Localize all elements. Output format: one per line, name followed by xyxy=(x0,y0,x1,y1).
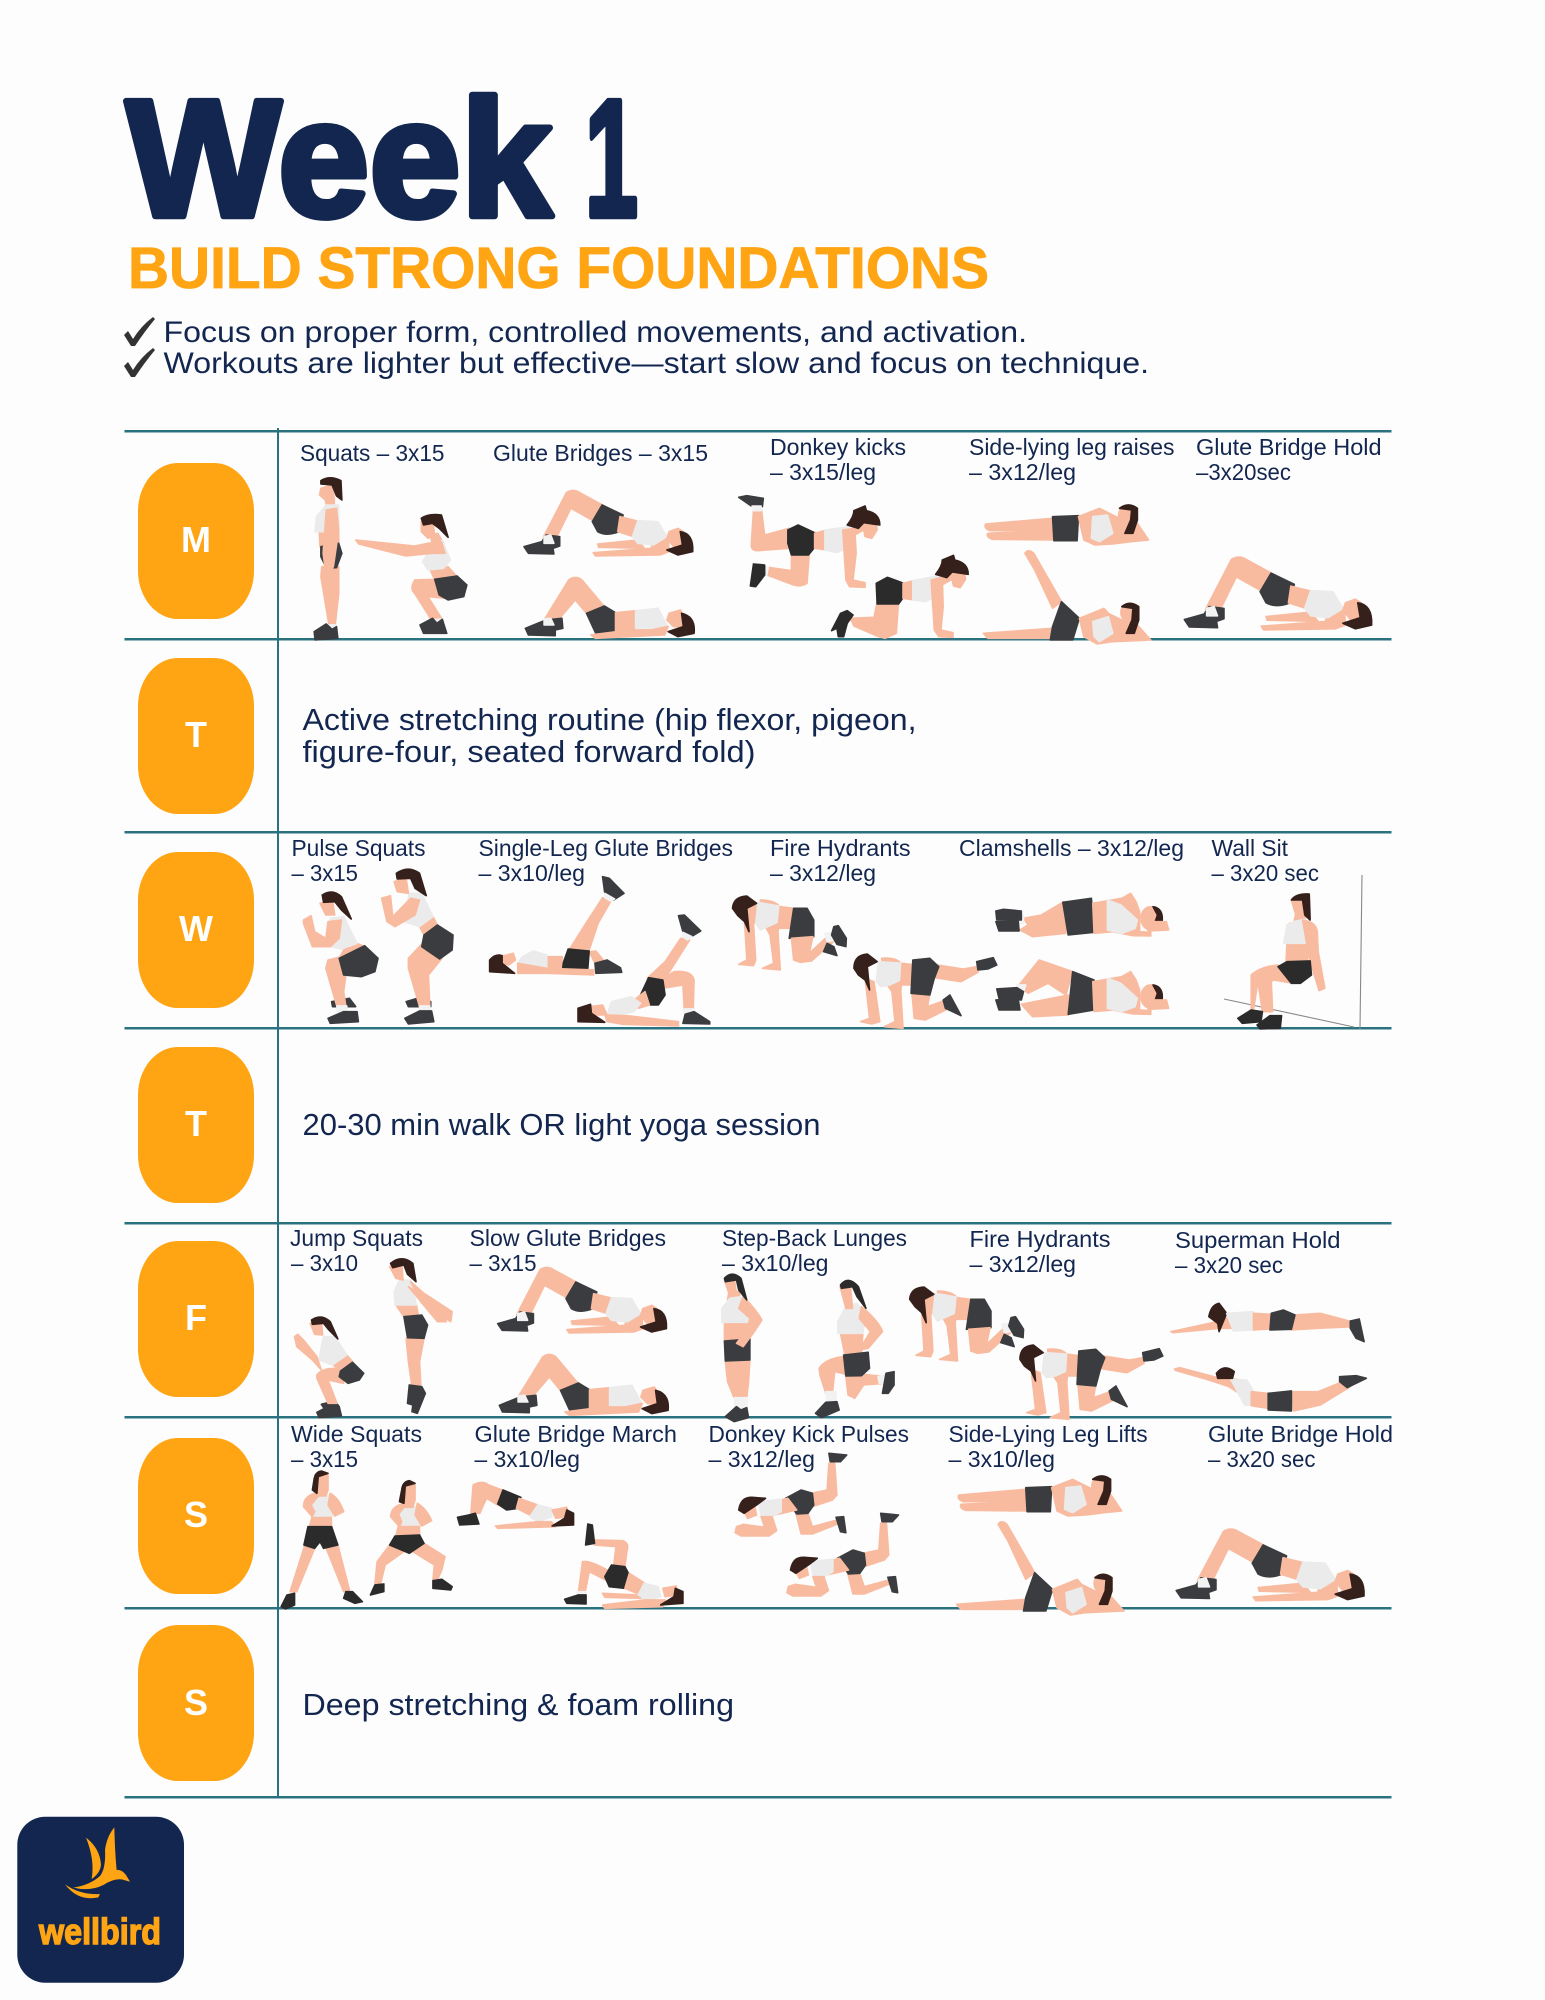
bullet list xyxy=(124,316,1149,380)
day pill: M: M xyxy=(181,519,211,560)
table grid lines xyxy=(124,428,1392,1798)
exercise: pulse squats: – 3x15 xyxy=(292,860,358,886)
exercise: glute bridge hold xyxy=(1176,1421,1393,1601)
panel: Tuesday row xyxy=(138,658,916,814)
title: 1 xyxy=(585,66,638,252)
exercise: glute bridges xyxy=(493,440,708,638)
exercise: fire hydrants: Fire Hydrants xyxy=(970,1226,1110,1252)
logo: wellbird xyxy=(17,1817,184,1983)
exercise: glute bridge hold: –3x20sec xyxy=(1196,459,1291,485)
day pill: T xyxy=(138,1047,254,1203)
exercise: donkey kicks: – 3x15/leg xyxy=(770,459,876,485)
wall and floor lines xyxy=(1224,875,1362,1029)
exercise: fire hydrants xyxy=(910,1226,1163,1419)
exercise: pulse squats xyxy=(292,835,453,1024)
exercise: squats xyxy=(300,440,467,640)
icon: check mark 1 xyxy=(124,317,155,346)
day pill: F: F xyxy=(185,1297,207,1338)
exercise: superman hold: Superman Hold xyxy=(1175,1227,1340,1253)
day pill: F xyxy=(138,1241,254,1397)
exercise: glute bridges: Glute Bridges – 3x15 xyxy=(493,440,708,466)
exercise: single-leg glute bridges: Single-Leg Glute Bridges xyxy=(478,835,733,861)
day pill: T: T xyxy=(185,714,207,755)
exercise: slow glute bridges: Slow Glute Bridges xyxy=(470,1225,666,1251)
exercise: jump squats: – 3x10 xyxy=(291,1250,358,1276)
day pill: W xyxy=(138,852,254,1008)
exercise: single-leg glute bridges xyxy=(478,835,733,1026)
rest day text: 20-30 min walk OR light yoga session xyxy=(302,1107,820,1142)
exercise: jump squats xyxy=(290,1225,452,1418)
exercise: fire hydrants: – 3x12/leg xyxy=(770,860,876,886)
exercise: step-back lunges: – 3x10/leg xyxy=(722,1250,828,1276)
day pill: M xyxy=(138,463,254,619)
panel: Wednesday row xyxy=(138,835,1362,1029)
panel: Sunday row xyxy=(138,1625,734,1781)
exercise: side-lying leg raises xyxy=(969,434,1174,644)
exercise: step-back lunges: Step-Back Lunges xyxy=(722,1225,907,1251)
exercise: donkey kick pulses: – 3x12/leg xyxy=(708,1446,815,1472)
exercise: wide squats: – 3x15 xyxy=(291,1446,358,1472)
wordmark: wellbird xyxy=(38,1911,161,1952)
bullet text 2: Workouts are lighter but effective—start slow and focus on technique. xyxy=(164,347,1149,380)
exercise: glute bridge hold: – 3x20 sec xyxy=(1208,1446,1316,1472)
exercise: step-back lunges xyxy=(722,1225,907,1422)
exercise: wall sit: Wall Sit xyxy=(1212,835,1288,861)
exercise: glute bridge march: – 3x10/leg xyxy=(474,1446,580,1472)
exercise: jump squats: Jump Squats xyxy=(290,1225,423,1251)
day pill: W: W xyxy=(179,908,213,949)
icon: check mark 2 xyxy=(124,348,155,377)
day pill: T xyxy=(138,658,254,814)
panel: Friday row xyxy=(138,1225,1366,1422)
title: Week xyxy=(126,66,553,252)
day pill: T: T xyxy=(185,1103,207,1144)
rest day text: Deep stretching & foam rolling xyxy=(302,1687,734,1722)
exercise: donkey kick pulses: Donkey Kick Pulses xyxy=(708,1421,909,1447)
exercise: clamshells: Clamshells – 3x12/leg xyxy=(959,835,1184,861)
subtitle: BUILD STRONG FOUNDATIONS xyxy=(128,236,989,301)
exercise: fire hydrants: – 3x12/leg xyxy=(970,1251,1076,1277)
rest day text: Active stretching routine (hip flexor, pigeon, xyxy=(302,702,916,737)
day pill: S xyxy=(138,1438,254,1594)
exercise: glute bridge hold: Glute Bridge Hold xyxy=(1208,1421,1393,1447)
panel: Thursday row xyxy=(138,1047,820,1203)
exercise: glute bridge march: Glute Bridge March xyxy=(474,1421,677,1447)
exercise: clamshells xyxy=(959,835,1184,1017)
exercise: glute bridge hold: Glute Bridge Hold xyxy=(1196,434,1382,460)
exercise: donkey kicks: Donkey kicks xyxy=(770,434,906,460)
exercise: wide squats: Wide Squats xyxy=(291,1421,422,1447)
exercise: side-lying leg lifts xyxy=(948,1421,1148,1615)
exercise: fire hydrants xyxy=(732,835,997,1028)
rest day text xyxy=(302,702,916,769)
exercise: side-lying leg raises: – 3x12/leg xyxy=(969,459,1076,485)
exercise: superman hold xyxy=(1171,1227,1366,1411)
exercise: slow glute bridges xyxy=(470,1225,668,1415)
exercise: squats: Squats – 3x15 xyxy=(300,440,444,466)
exercise: side-lying leg lifts: – 3x10/leg xyxy=(948,1446,1055,1472)
exercise: side-lying leg lifts: Side-Lying Leg Lifts xyxy=(948,1421,1148,1447)
rest day text: figure-four, seated forward fold) xyxy=(302,734,756,769)
exercise: single-leg glute bridges: – 3x10/leg xyxy=(478,860,585,886)
exercise: pulse squats: Pulse Squats xyxy=(292,835,426,861)
exercise: wide squats xyxy=(281,1421,452,1609)
exercise: glute bridge hold xyxy=(1184,434,1382,630)
day pill: S xyxy=(138,1625,254,1781)
exercise: glute bridge march xyxy=(457,1421,683,1608)
exercise: donkey kicks xyxy=(739,434,968,638)
exercise: superman hold: – 3x20 sec xyxy=(1175,1252,1283,1278)
exercise: fire hydrants: Fire Hydrants xyxy=(770,835,911,861)
exercise: side-lying leg raises: Side-lying leg raises xyxy=(969,434,1174,460)
day pill: S: S xyxy=(184,1494,208,1535)
exercise: wall sit: – 3x20 sec xyxy=(1212,860,1319,886)
panel: Monday row xyxy=(138,434,1382,644)
panel: Saturday row xyxy=(138,1421,1393,1615)
exercise: wall sit xyxy=(1212,835,1362,1029)
bullet text 1: Focus on proper form, controlled movements, and activation. xyxy=(164,316,1027,349)
exercise: slow glute bridges: – 3x15 xyxy=(470,1250,536,1276)
exercise: donkey kick pulses xyxy=(708,1421,909,1596)
day pill: S: S xyxy=(184,1682,208,1723)
icon: bird xyxy=(65,1827,130,1898)
